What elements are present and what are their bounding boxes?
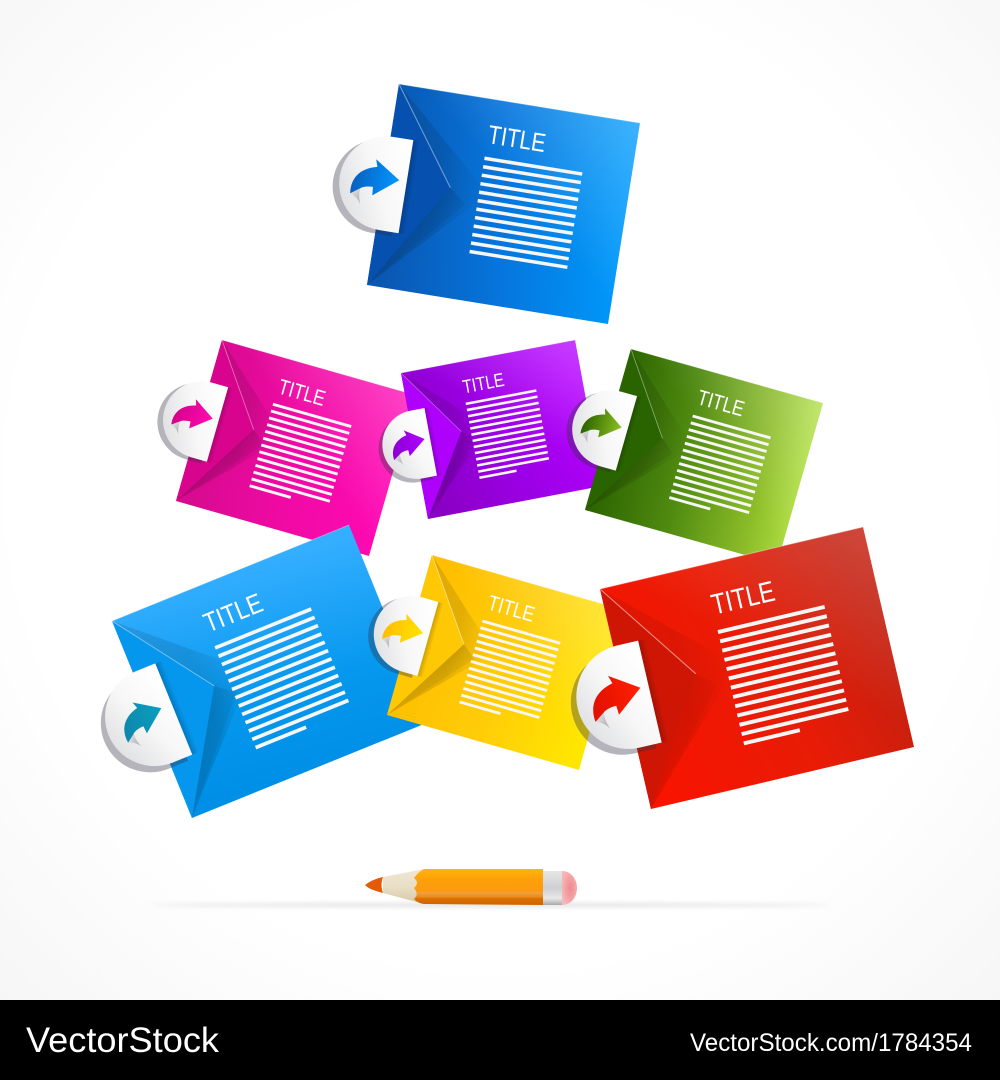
- icon: arrow badge: [326, 128, 420, 238]
- envelope body: [387, 555, 624, 770]
- icon: arrow badge: [559, 639, 670, 765]
- title: TITLE: [485, 591, 537, 627]
- title: TITLE: [708, 576, 778, 622]
- text lines: [470, 158, 582, 267]
- panel: purple envelope: [365, 340, 602, 526]
- panel: magenta envelope: [136, 329, 415, 556]
- envelope body: [600, 527, 914, 809]
- footer image id text: VectorStock.com/1784354: [690, 1029, 972, 1057]
- envelope body: [585, 349, 823, 564]
- text lines: [250, 404, 351, 508]
- text lines: [215, 609, 352, 748]
- envelope body: [112, 525, 429, 818]
- panel: red envelope: [546, 527, 914, 822]
- panel: large sky-blue envelope: [63, 525, 429, 838]
- title: TITLE: [461, 370, 506, 398]
- title: TITLE: [486, 119, 548, 158]
- icon: arrow badge: [84, 661, 201, 787]
- icon: arrow badge: [557, 380, 643, 475]
- text lines: [669, 416, 771, 519]
- pencil ground shadow: [150, 903, 830, 907]
- icon: pencil: [365, 869, 577, 905]
- panel: green envelope: [546, 338, 823, 564]
- icon: arrow badge: [359, 586, 444, 681]
- text lines: [718, 607, 850, 743]
- icon: arrow badge: [372, 407, 442, 488]
- envelope body: [401, 340, 602, 519]
- panel: top blue envelope: [318, 76, 640, 324]
- envelope body: [367, 84, 640, 324]
- icon: arrow badge: [148, 371, 234, 467]
- envelope body: [176, 340, 415, 556]
- text lines: [460, 621, 560, 724]
- text lines: [466, 391, 550, 478]
- panel: yellow envelope: [348, 544, 624, 770]
- title: TITLE: [199, 587, 267, 638]
- title: TITLE: [695, 385, 747, 421]
- title: TITLE: [276, 375, 328, 411]
- footer logo text: VectorStock: [26, 1021, 220, 1060]
- footer bar: [0, 1000, 1000, 1080]
